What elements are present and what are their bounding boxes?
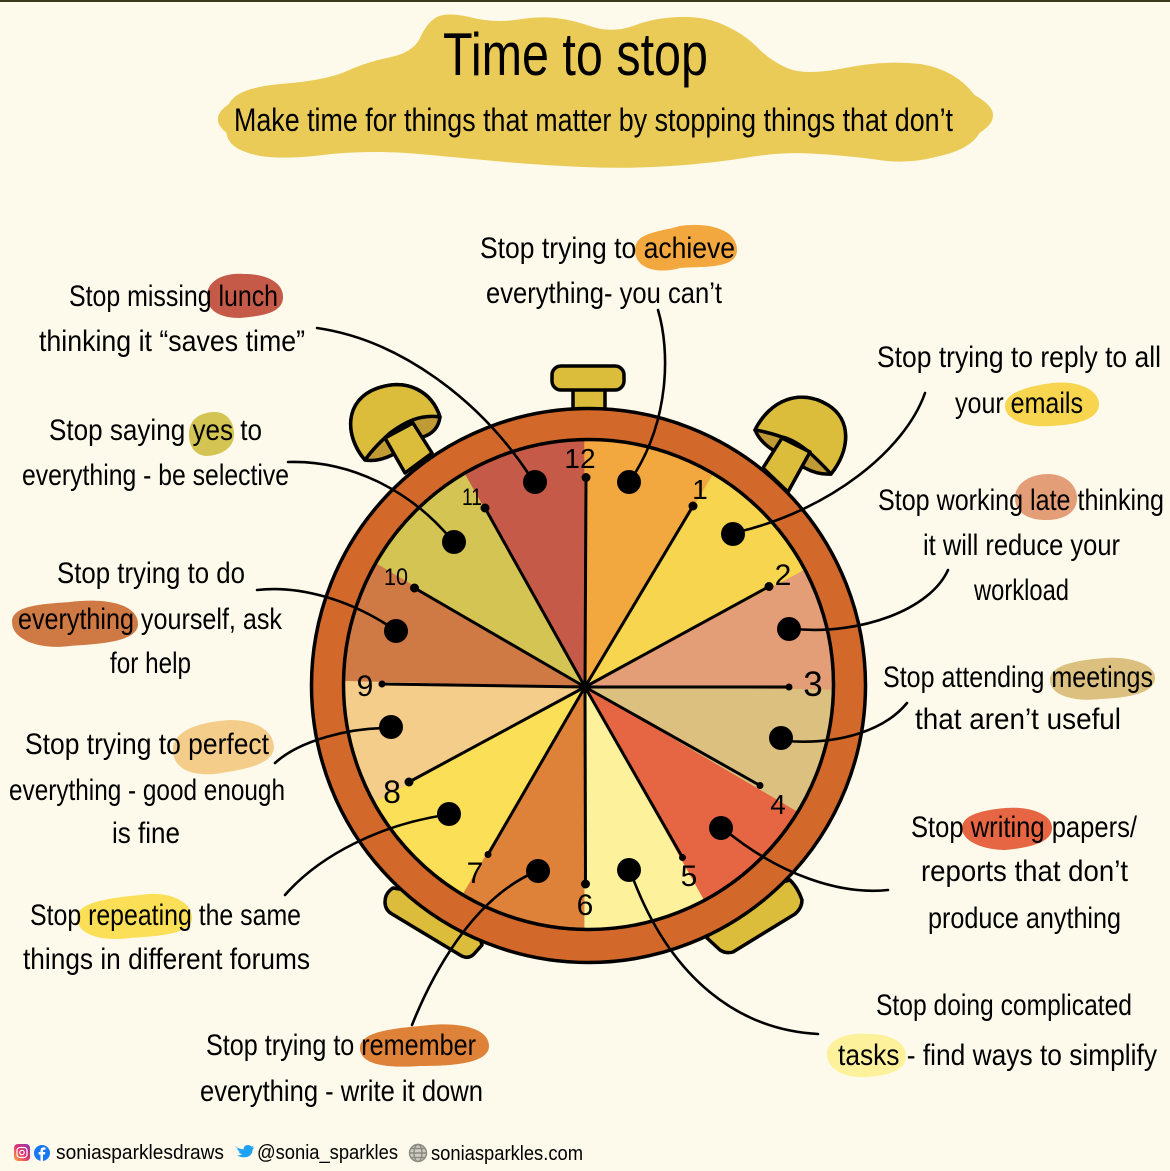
label 9: everything: everything yourself, ask	[18, 603, 283, 636]
clock numbers: 5	[681, 860, 697, 893]
label 3: meetings	[883, 658, 1155, 736]
leader dots	[379, 470, 801, 883]
label 2: late: workload	[973, 574, 1069, 607]
label 6: remember: everything - write it down	[200, 1075, 483, 1108]
text: twitter handle: @sonia_sparkles	[257, 1142, 398, 1164]
highlight	[12, 601, 138, 647]
clock	[310, 364, 868, 964]
highlight	[207, 274, 283, 318]
clock numbers: 10	[384, 564, 408, 591]
clock numbers: 4	[770, 789, 786, 820]
clock numbers: 11	[462, 484, 482, 511]
highlight	[1050, 658, 1155, 700]
highlight	[962, 808, 1052, 850]
clock spokes	[380, 474, 791, 887]
label 11: lunch: Stop missing lunch	[69, 280, 278, 313]
highlight	[1015, 474, 1077, 520]
label 4: writing: reports that don’t	[921, 855, 1129, 888]
label 9: everything: for help	[110, 647, 191, 680]
highlight	[77, 894, 192, 939]
label 9: everything	[12, 557, 283, 680]
leader lines	[257, 310, 948, 1034]
label 2: late	[878, 474, 1164, 607]
highlight	[827, 1034, 906, 1077]
icon: twitter	[235, 1145, 254, 1157]
left foot	[385, 888, 482, 957]
label 6: remember: Stop trying to remember	[206, 1029, 476, 1062]
label 7: repeating	[23, 894, 310, 976]
label 4: writing: Stop writing papers/	[911, 811, 1138, 844]
clock numbers: 6	[577, 889, 593, 922]
label 7: repeating: Stop repeating the same	[30, 899, 301, 932]
footer credits	[14, 1142, 583, 1165]
title banner	[218, 14, 993, 168]
label 8: perfect: everything - good enough	[9, 774, 285, 807]
clock numbers: 1	[692, 474, 708, 505]
label 10: yes: Stop saying yes to	[49, 414, 262, 447]
clock numbers: 12	[564, 443, 596, 474]
label 11: lunch: thinking it “saves time”	[39, 325, 305, 358]
label 4: writing	[911, 808, 1138, 935]
label 7: repeating: things in different forums	[23, 943, 310, 976]
label 1: emails: your emails	[955, 387, 1083, 420]
clock numbers	[357, 443, 823, 922]
label 5: tasks	[827, 989, 1157, 1077]
label 11: lunch	[39, 274, 305, 358]
highlight	[635, 225, 737, 271]
label 8: perfect: Stop trying to perfect	[25, 728, 270, 761]
icon: globe	[410, 1144, 426, 1162]
subtitle: Make time for things that matter by stopping things that don’t	[234, 102, 953, 138]
label 6: remember	[200, 1024, 489, 1108]
highlight	[360, 1024, 489, 1067]
clock numbers: 3	[803, 665, 823, 704]
label 1: emails	[877, 341, 1161, 426]
label 2: late: it will reduce your	[923, 529, 1120, 562]
label 10: yes: everything - be selective	[22, 459, 289, 492]
label 10: yes	[22, 412, 289, 492]
clock face sectors	[345, 441, 832, 928]
highlight	[189, 412, 234, 456]
right foot	[707, 880, 802, 953]
text: instagram handle: soniasparklesdraws	[56, 1142, 224, 1164]
label 3: meetings: that aren’t useful	[915, 703, 1121, 736]
clock numbers: 8	[383, 774, 401, 810]
icon: instagram	[14, 1144, 30, 1161]
clock numbers: 7	[467, 857, 483, 890]
label 8: perfect	[9, 720, 285, 850]
label 12: achieve: Stop trying to achieve	[480, 232, 735, 265]
top button	[552, 366, 624, 413]
clock numbers: 2	[775, 559, 791, 592]
label 4: writing: produce anything	[928, 902, 1121, 935]
title: Time to stop	[443, 21, 708, 88]
outer ring	[312, 408, 866, 962]
inner ring outline	[344, 440, 834, 930]
banner blob	[218, 14, 993, 168]
highlight	[1005, 382, 1099, 426]
clock numbers: 9	[357, 670, 373, 703]
right bell	[755, 397, 846, 492]
left bell	[351, 385, 440, 473]
icon: facebook	[34, 1145, 50, 1161]
label 12: achieve	[480, 225, 737, 310]
label 12: achieve: everything- you can’t	[486, 277, 723, 310]
highlight	[173, 720, 274, 774]
text: website: soniasparkles.com	[431, 1143, 583, 1165]
label 9: everything: Stop trying to do	[57, 557, 245, 590]
label 8: perfect: is fine	[112, 817, 180, 850]
